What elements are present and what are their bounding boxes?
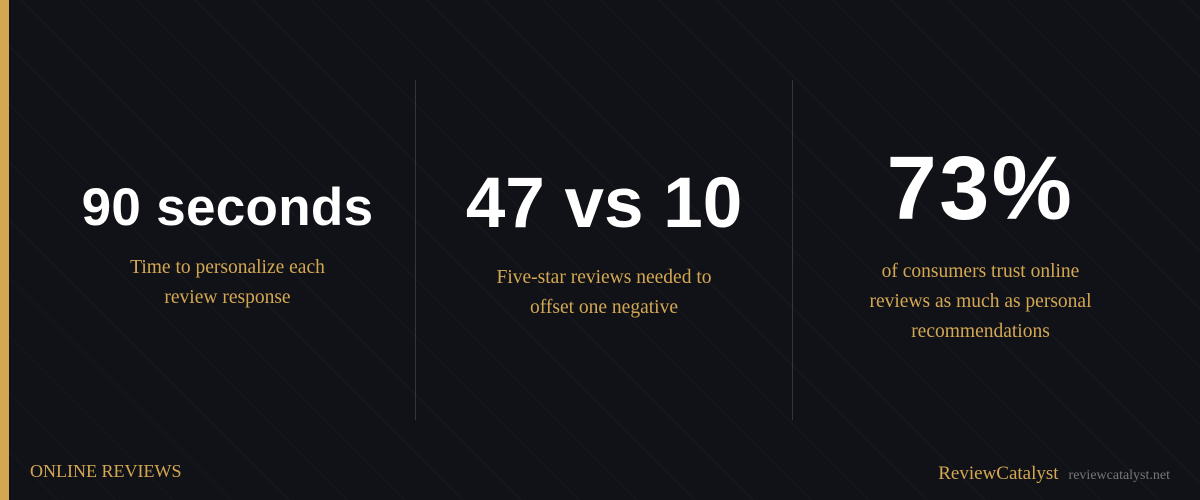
- number: 47 vs 10: [466, 164, 742, 243]
- description: [130, 257, 325, 308]
- stat: 90 seconds: [82, 178, 373, 308]
- description: recommendations: [911, 321, 1050, 342]
- description: reviews as much as personal: [869, 291, 1092, 312]
- description: Time to personalize each: [130, 257, 325, 278]
- number: 73%: [887, 139, 1074, 239]
- stat: 73%: [869, 139, 1092, 342]
- footer brand: ReviewCatalyst reviewcatalyst.net: [938, 463, 1170, 484]
- description: review response: [164, 287, 291, 308]
- description: [869, 261, 1092, 342]
- footer label: ONLINE REVIEWS: [30, 461, 181, 481]
- description: [497, 267, 711, 318]
- description: of consumers trust online: [882, 261, 1079, 282]
- accent bar: [0, 0, 9, 500]
- description: Five-star reviews needed to: [497, 267, 711, 288]
- description: offset one negative: [530, 297, 678, 318]
- number: 90 seconds: [82, 178, 373, 237]
- stat: 47 vs 10: [466, 164, 742, 318]
